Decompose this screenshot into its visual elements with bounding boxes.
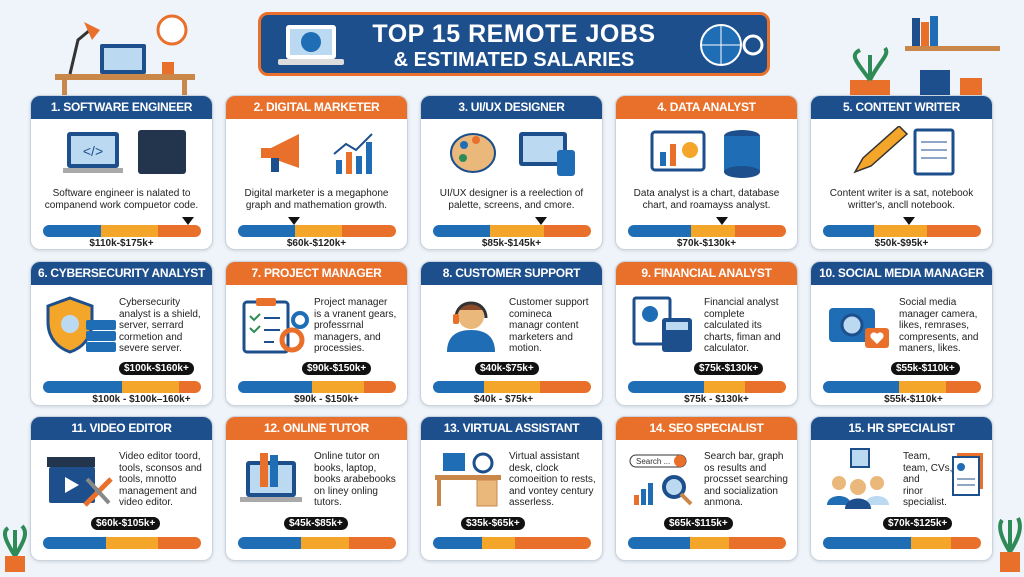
card 3: $85k-$145k+: [482, 238, 541, 249]
icon: search graph: [630, 454, 692, 506]
card 8: 8. CUSTOMER SUPPORT: [443, 266, 580, 280]
card 12: 12. ONLINE TUTOR: [264, 421, 369, 435]
card 11: video editor.: [119, 497, 173, 508]
card 11: $60k-$105k+: [96, 518, 155, 529]
card 8: $40k - $75k+: [474, 394, 533, 405]
card 15: $70k-$125k+: [888, 518, 947, 529]
card 9: charts, fiman and: [704, 332, 781, 342]
card 7: $90k-$150k+: [307, 363, 366, 374]
card 7: professrnal: [314, 320, 363, 331]
card 12: books arabebooks: [314, 474, 396, 485]
card 15: specialist.: [903, 497, 947, 508]
card 14: Search bar, graph: [704, 451, 784, 462]
card 5: 5. CONTENT WRITER: [843, 100, 960, 114]
card 7: managers, and: [314, 332, 381, 342]
card 14: $65k-$115k+: [669, 518, 728, 529]
card 11: tools, mnotto: [119, 474, 176, 485]
card 7: processies.: [314, 343, 365, 354]
card 6: server, serrard: [119, 320, 183, 331]
card 15: rinor: [903, 486, 923, 496]
card 12: on liney onling: [314, 486, 378, 496]
card 10: compresents, and: [899, 332, 978, 342]
card 3: [420, 95, 603, 250]
card 10: Social media: [899, 297, 956, 308]
card 13: $35k-$65k+: [466, 518, 520, 529]
icon: palette screens: [450, 132, 575, 176]
card 4: [615, 95, 798, 250]
card 7: is a vranent gears,: [314, 308, 396, 320]
decoration: plant bottom-left: [2, 524, 28, 572]
card 3: 3. UI/UX DESIGNER: [458, 100, 565, 114]
card 4: Data analyst is a chart, database: [634, 188, 779, 199]
card 12: [225, 416, 408, 561]
card 3: UI/UX designer is a reelection of: [440, 188, 583, 199]
card 14: procsset searching: [704, 474, 788, 485]
card 7: $90k - $150k+: [294, 394, 359, 405]
icon: laptop code: [63, 130, 186, 174]
card 3: palette, screens, and cmore.: [448, 200, 575, 211]
card 9: complete: [704, 308, 745, 320]
card 6: Cybersecurity: [119, 297, 180, 308]
card 8: Customer support: [509, 297, 588, 308]
card 10: $55k-$110k+: [884, 394, 943, 405]
card 12: $45k-$85k+: [289, 518, 343, 529]
card 14: [615, 416, 798, 561]
card 11: 11. VIDEO EDITOR: [71, 421, 172, 435]
decoration: plant bottom-right: [998, 517, 1022, 572]
card 1: Software engineer is nalated to: [53, 188, 190, 199]
card 6: analyst is a shield,: [119, 308, 201, 320]
card 2: Digital marketer is a megaphone: [245, 188, 388, 199]
card 15: team, CVs,: [903, 462, 952, 474]
card 6: cormetion and: [119, 332, 182, 342]
card 13: desk, clock: [509, 462, 558, 474]
card 13: [420, 416, 603, 561]
icon: megaphone chart: [261, 133, 373, 174]
card 8: marketers and: [509, 332, 573, 342]
card 4: chart, and roamayss analyst.: [643, 200, 770, 211]
card 1: $110k-$175k+: [89, 238, 154, 249]
decoration: shelf top-right: [850, 16, 1000, 95]
card 15: and: [903, 474, 920, 485]
card 11: [30, 416, 213, 561]
card 12: Online tutor on: [314, 451, 380, 462]
card 2: 2. DIGITAL MARKETER: [254, 100, 379, 114]
card 13: asserless.: [509, 497, 554, 508]
card 14: and socialization: [704, 486, 778, 496]
card 15: Team,: [903, 451, 930, 462]
card 6: severe server.: [119, 343, 182, 354]
card 5: Content writer is a sat, notebook: [830, 188, 973, 199]
card 11: Video editor toord,: [119, 451, 201, 462]
card 9: 9. FINANCIAL ANALYST: [641, 266, 772, 280]
icon: pencil notebook: [853, 126, 954, 176]
card 9: Financial analyst: [704, 297, 778, 308]
icon: shield server: [46, 296, 116, 354]
card 13: comoeition to rests,: [509, 474, 596, 485]
card 1: [30, 95, 213, 250]
card 5: writter's, ancll notebook.: [848, 200, 955, 211]
card 10: manager camera,: [899, 308, 977, 320]
card 14: anmona.: [704, 497, 743, 508]
card 1: 1. SOFTWARE ENGINEER: [51, 100, 192, 114]
card 2: [225, 95, 408, 250]
card 5: [810, 95, 993, 250]
card 4: 4. DATA ANALYST: [657, 100, 756, 114]
icon: camera likes: [829, 308, 889, 348]
card 9: calculator.: [704, 343, 749, 354]
card 10: maners, likes.: [899, 343, 961, 354]
icon: team CVs: [827, 448, 889, 509]
card 9: $75k - $130k+: [684, 394, 749, 405]
card 13: Virtual assistant: [509, 451, 579, 462]
card 10: $55k-$110k+: [896, 363, 955, 374]
card 6: $100k-$160k+: [124, 363, 189, 374]
card 11: tools, sconsos and: [119, 462, 202, 474]
card 8: managr content: [509, 320, 578, 331]
card 9: $75k-$130k+: [699, 363, 758, 374]
card 15: [810, 416, 993, 561]
card 6: $100k - $100k–160k+: [92, 394, 191, 405]
icon: chart database: [650, 130, 760, 178]
icon: globe headset: [700, 24, 764, 66]
card 8: [420, 261, 603, 406]
icon: chart calculator: [632, 296, 692, 352]
card 4: $70k-$130k+: [677, 238, 736, 249]
card 11: management and: [119, 486, 197, 496]
title banner: [258, 12, 770, 76]
card 7: 7. PROJECT MANAGER: [252, 266, 381, 280]
card 10: likes, remrases,: [899, 320, 969, 331]
card 9: calculated its: [704, 320, 762, 331]
icon: clapboard tools: [47, 457, 113, 507]
card 14: 14. SEO SPECIALIST: [650, 421, 763, 435]
decoration: desk top-left: [55, 14, 195, 95]
card 8: motion.: [509, 343, 542, 354]
icon: desk clock: [435, 452, 501, 506]
icon: laptop books: [240, 453, 302, 502]
icon: headset agent: [447, 302, 495, 352]
card 5: $50k-$95k+: [875, 238, 928, 249]
card 15: 15. HR SPECIALIST: [848, 421, 955, 435]
card 10: [810, 261, 993, 406]
card 9: [615, 261, 798, 406]
card 12: books, laptop,: [314, 462, 376, 474]
card 7: Project manager: [314, 297, 387, 308]
card 1: companend work compuetor code.: [45, 200, 198, 211]
card 2: graph and mathemation growth.: [246, 200, 387, 211]
card 6: 6. CYBERSECURITY ANALYST: [38, 266, 205, 280]
card 13: 13. VIRTUAL ASSISTANT: [444, 421, 579, 435]
icon: CV document: [952, 453, 983, 496]
card 7: [225, 261, 408, 406]
card 12: tutors.: [314, 497, 342, 508]
card 13: and vontey century: [509, 486, 594, 496]
icon: laptop globe: [278, 25, 344, 65]
card 8: comineca: [509, 308, 552, 320]
card 6: [30, 261, 213, 406]
card 10: 10. SOCIAL MEDIA MANAGER: [819, 266, 984, 280]
title banner: TOP 15 REMOTE JOBS: [372, 20, 656, 48]
card 8: $40k-$75k+: [480, 363, 534, 374]
card 2: $60k-$120k+: [287, 238, 346, 249]
icon: search graph: Search ...: [636, 457, 670, 466]
title banner: & ESTIMATED SALARIES: [394, 49, 634, 71]
icon: clipboard gears: [242, 298, 309, 354]
icon: laptop code: </>: [83, 143, 103, 159]
card 14: os results and: [704, 462, 766, 474]
